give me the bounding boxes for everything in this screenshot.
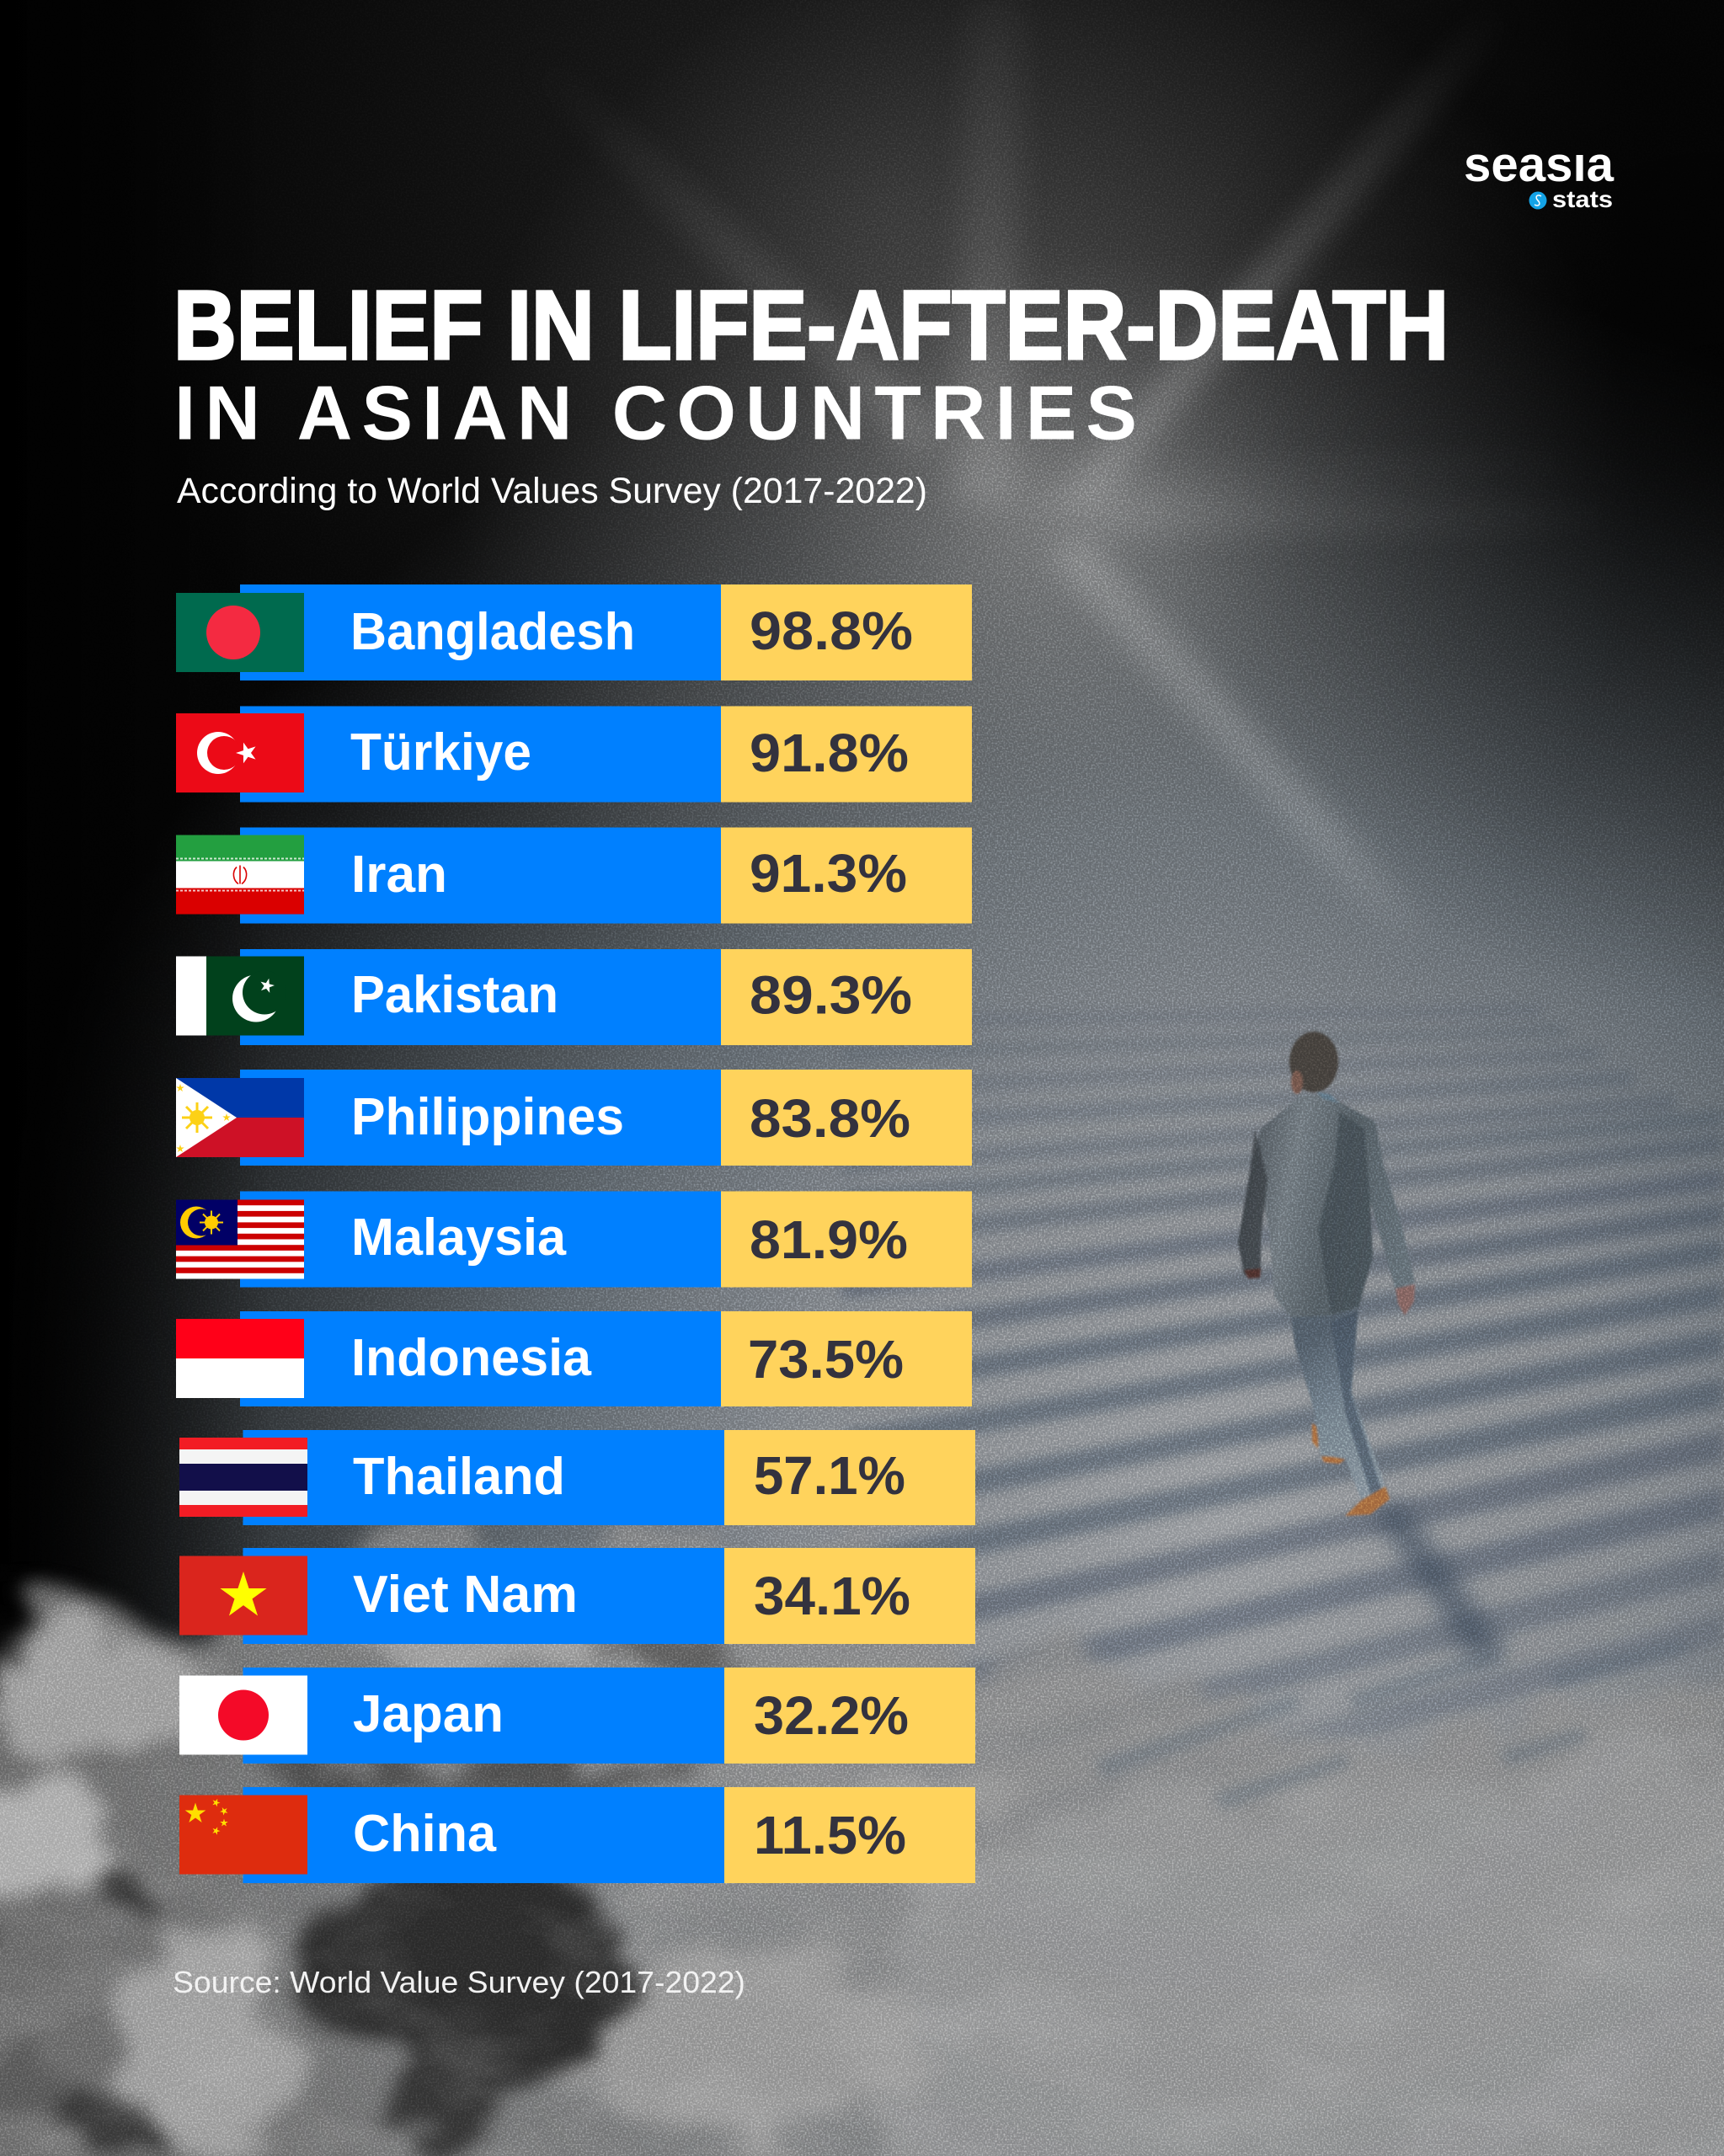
- row: Türkiye: 91.8%: [750, 723, 909, 783]
- flag: Bangladesh: [176, 593, 304, 672]
- collar: [1316, 1091, 1339, 1103]
- flag: Türkiye: [176, 713, 304, 792]
- row: Japan: Japan: [353, 1685, 504, 1743]
- flag: Pakistan: [176, 957, 304, 1036]
- row: Iran: 91.3%: [750, 843, 907, 904]
- row: Viet Nam: 34.1%: [754, 1566, 910, 1626]
- row: Thailand: 57.1%: [754, 1445, 905, 1506]
- subtitle: IN ASIAN COUNTRIES: [174, 371, 1137, 456]
- row: Malaysia: 81.9%: [750, 1209, 908, 1270]
- flag: Thailand: [179, 1438, 307, 1517]
- row: Thailand: Thailand: [353, 1448, 565, 1506]
- back foot: [1312, 1423, 1345, 1464]
- row: Japan: 32.2%: [754, 1685, 909, 1746]
- row: Bangladesh: 98.8%: [750, 600, 913, 661]
- row: Japan: [179, 1668, 975, 1764]
- survey note: According to World Values Survey (2017-2022): [177, 471, 927, 511]
- row: China: [179, 1787, 975, 1883]
- man walking up the stairs: [1238, 1032, 1415, 1516]
- flag: Viet Nam: [179, 1556, 307, 1636]
- row: Malaysia: Malaysia: [351, 1209, 567, 1267]
- jacket: [1238, 1094, 1415, 1317]
- hands: [1244, 1268, 1261, 1278]
- source note: Source: World Value Survey (2017-2022): [173, 1965, 745, 1999]
- flag: Indonesia: [176, 1319, 304, 1398]
- row: Philippines: [176, 1070, 972, 1166]
- flag: Malaysia: [176, 1199, 304, 1278]
- row: Bangladesh: [176, 584, 972, 680]
- row: China: 11.5%: [754, 1805, 906, 1865]
- flag: China: [179, 1796, 307, 1875]
- row: Indonesia: Indonesia: [351, 1329, 592, 1387]
- row: Iran: [176, 827, 972, 923]
- row: Pakistan: [176, 949, 972, 1045]
- staircase shadows: [842, 1006, 1724, 1875]
- row: Bangladesh: Bangladesh: [350, 603, 635, 661]
- row: Iran: Iran: [351, 846, 447, 904]
- remaining stair fragments over the clouds: [1095, 1638, 1688, 1811]
- front shoe: [1345, 1486, 1390, 1516]
- logo: seasia stats: stats: [1552, 186, 1613, 212]
- row: Thailand: [179, 1430, 975, 1525]
- light rays: [514, 0, 1642, 956]
- row: Indonesia: 73.5%: [748, 1329, 904, 1390]
- logo badge: [1529, 192, 1546, 209]
- row: Viet Nam: Viet Nam: [353, 1566, 578, 1624]
- trousers: [1291, 1310, 1387, 1502]
- head: [1289, 1032, 1338, 1092]
- row: Pakistan: Pakistan: [351, 966, 558, 1024]
- clouds: [0, 1545, 1724, 2156]
- title: BELIEF IN LIFE-AFTER-DEATH: [173, 270, 1449, 380]
- left darkness: [0, 0, 270, 1769]
- row: Philippines: 83.8%: [750, 1088, 910, 1149]
- row: Malaysia: [176, 1191, 972, 1287]
- flag: Iran: [176, 835, 304, 915]
- row: Indonesia: [176, 1311, 972, 1406]
- row: Türkiye: Türkiye: [350, 723, 531, 782]
- flag: Philippines: [176, 1078, 304, 1157]
- row: Philippines: Philippines: [351, 1088, 624, 1146]
- row: China: China: [353, 1805, 497, 1863]
- row: Türkiye: [176, 706, 972, 802]
- flag: Japan: [179, 1676, 307, 1755]
- logo: seasia stats: [1465, 155, 1614, 209]
- logo: seasia stats: seasia: [1464, 137, 1615, 192]
- row: Viet Nam: [179, 1548, 975, 1644]
- row: Pakistan: 89.3%: [750, 965, 912, 1026]
- man's shadow: [1369, 1503, 1508, 1663]
